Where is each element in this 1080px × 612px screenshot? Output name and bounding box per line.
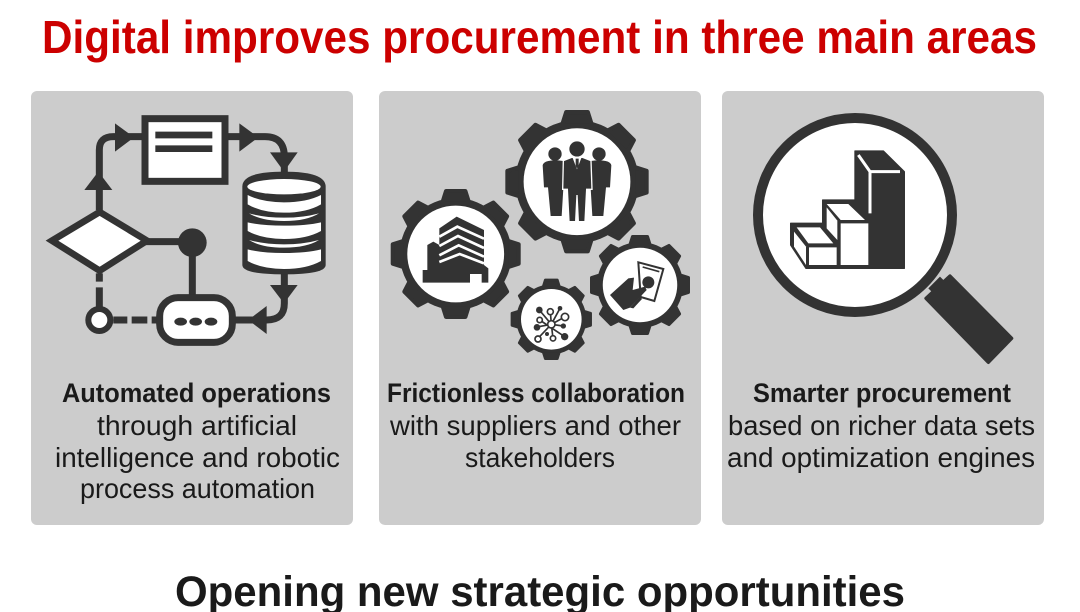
text: smarter procurement: based on richer data sets xyxy=(728,410,1035,441)
text: smarter procurement: Smarter procurement xyxy=(753,378,1011,408)
icon: connected gears xyxy=(393,112,688,359)
panel: automated operations xyxy=(31,91,353,525)
gear: building xyxy=(393,191,519,317)
panel: frictionless collaboration xyxy=(379,91,701,525)
text: automated operations: process automation xyxy=(80,473,315,504)
text: automated operations xyxy=(55,378,340,504)
text: frictionless collaboration: with suppliers and other xyxy=(389,410,681,441)
text: smarter procurement: and optimization engines xyxy=(727,442,1035,473)
icon: process flow diagram xyxy=(52,119,326,342)
text: automated operations: through artificial xyxy=(97,410,297,441)
text: frictionless collaboration: Frictionless collaboration xyxy=(387,378,685,408)
panel: smarter procurement xyxy=(722,91,1044,525)
text: automated operations: Automated operations xyxy=(62,378,331,408)
text: frictionless collaboration: stakeholders xyxy=(465,442,615,473)
gear: people xyxy=(507,112,647,251)
gear: network xyxy=(512,280,591,359)
text: automated operations: intelligence and robotic xyxy=(55,442,340,473)
icon: magnifier over bar chart xyxy=(758,118,1012,362)
gear: hand with money xyxy=(592,236,688,334)
text: frictionless collaboration xyxy=(387,378,685,473)
text: smarter procurement xyxy=(727,378,1035,473)
